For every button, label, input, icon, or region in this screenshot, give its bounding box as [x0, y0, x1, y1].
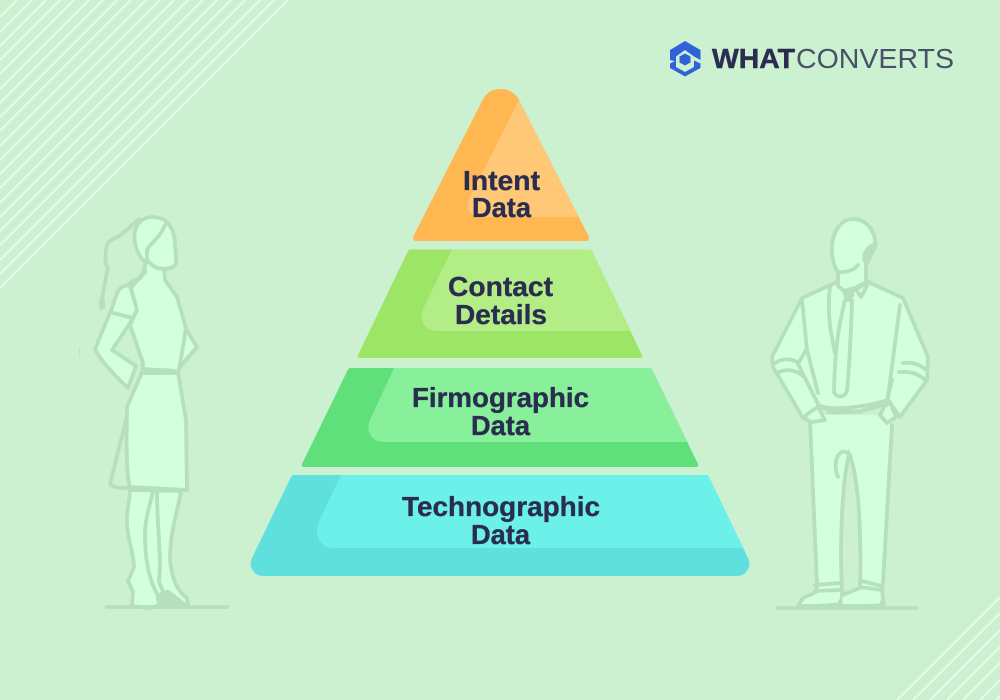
tier: Firmographic Data: Firmographic — [412, 382, 589, 413]
tier: Contact Details: Details — [455, 299, 547, 330]
man head and neck — [832, 219, 875, 291]
logo wordmark: WHAT — [712, 43, 795, 74]
tier: Firmographic Data — [302, 368, 698, 467]
woman hair — [102, 219, 140, 300]
tier: Technographic Data: Technographic — [402, 491, 600, 522]
tier: Intent Data — [413, 89, 589, 241]
man tie and collar — [834, 284, 868, 396]
tier: Contact Details — [358, 250, 642, 358]
woman torso — [123, 260, 186, 373]
logo: WhatConverts — [670, 41, 954, 76]
tier: Intent Data: Data — [472, 192, 531, 223]
tier: Technographic Data: Data — [471, 519, 530, 550]
tier: Intent Data: Intent — [463, 165, 540, 196]
tier: Contact Details: Contact — [448, 271, 553, 302]
woman arms — [95, 286, 197, 388]
woman skirt — [110, 372, 187, 490]
figure: man — [772, 219, 928, 608]
tier: Technographic Data — [251, 475, 749, 576]
tier: Firmographic Data: Data — [471, 410, 530, 441]
logo wordmark: CONVERTS — [796, 43, 954, 74]
woman legs — [107, 490, 227, 608]
woman head — [135, 217, 176, 269]
man torso and arms — [772, 282, 928, 423]
pyramid — [251, 89, 749, 576]
icon: hexagon logo mark — [670, 41, 700, 76]
man legs — [777, 415, 916, 608]
figure: woman — [80, 217, 227, 608]
